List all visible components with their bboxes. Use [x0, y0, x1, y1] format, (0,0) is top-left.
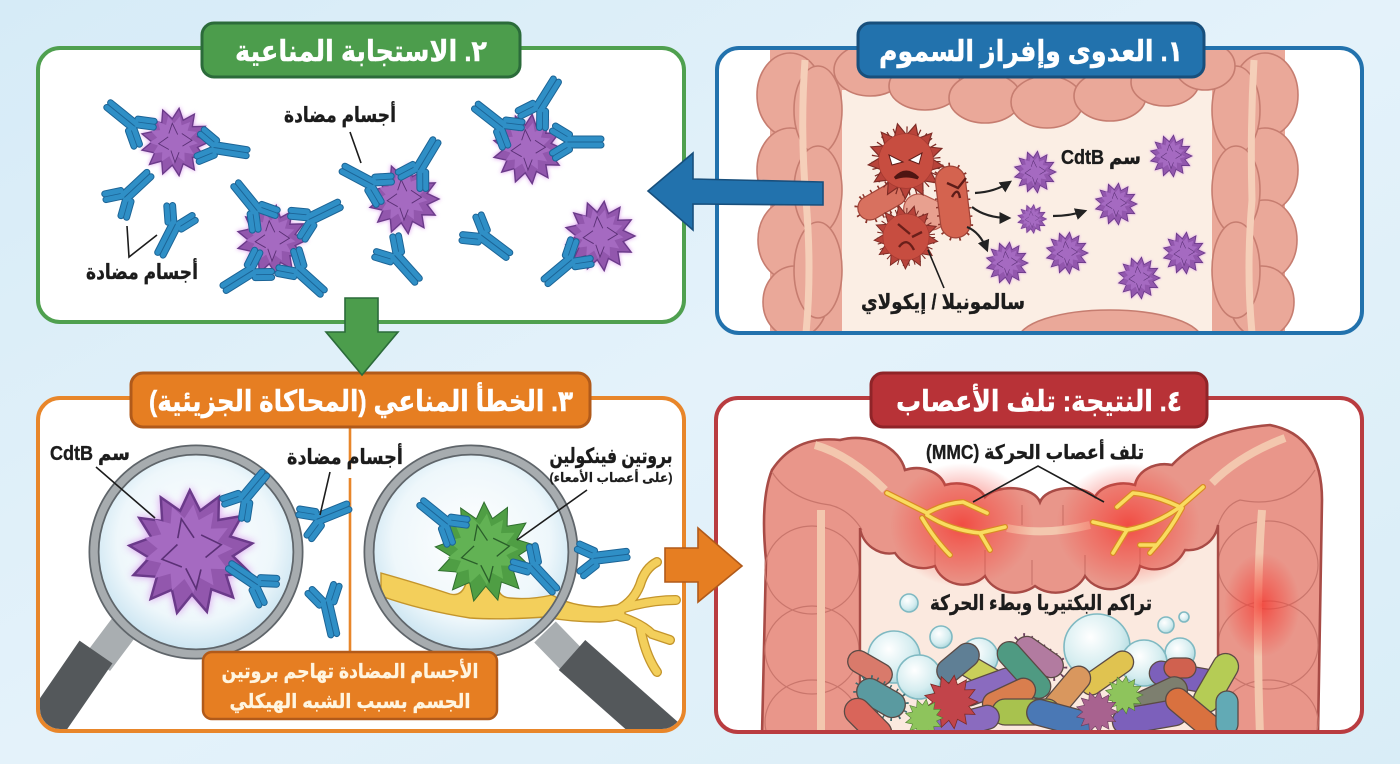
heading 4: ٤. النتيجة: تلف الأعصاب: [896, 383, 1182, 418]
arrow: panel 3 to panel 4: [665, 528, 742, 602]
vinculin protein magnified: [430, 496, 541, 608]
label: vinculin: (على أعصاب الأمعاء): [550, 469, 672, 485]
panel 3 frame: [38, 398, 684, 731]
toxin particles: [985, 134, 1206, 300]
bubbles: [868, 594, 1195, 699]
caption box: الجسم بسبب الشبه الهيكلي: [230, 691, 470, 714]
panel: 1 infection and toxin release: [717, 23, 1362, 370]
heading 4: [871, 373, 1207, 427]
label: salmonella / e. coli: [861, 250, 1025, 315]
viruses with antibodies: [99, 72, 637, 304]
label: CdtB toxin: [50, 443, 155, 518]
label: bacterial buildup: تراكم البكتيريا وبطء الحركة: [930, 592, 1152, 615]
label: CdtB toxin: سم CdtB: [50, 443, 130, 465]
label: motility nerve damage: [926, 438, 1144, 502]
red bacteria cluster: [853, 119, 972, 273]
arrow: panel 2 to panel 3: [326, 298, 398, 375]
label: antibodies top: أجسام مضادة: [284, 100, 396, 127]
magnifier left: [32, 450, 298, 745]
heading 3: ٣. الخطأ المناعي (المحاكاة الجزيئية): [149, 382, 573, 418]
panel: 2 immune response: [38, 23, 684, 322]
bacteria pile: [844, 633, 1240, 730]
release arrows: [967, 182, 1085, 250]
antibodies in panel 3: [221, 464, 629, 638]
panel: 4 result nerve damage: [716, 373, 1362, 764]
heading 3: [131, 373, 590, 427]
label: antibodies bottom-left: أجسام مضادة: [86, 257, 198, 284]
caption box: الأجسام المضادة تهاجم بروتين: [222, 658, 478, 683]
label: salmonella / e. coli: سالمونيلا / إيكولاي: [861, 291, 1025, 315]
damaged colon: [762, 425, 1322, 764]
damaged nerves: [887, 487, 1203, 555]
label: motility nerve damage: تلف أعصاب الحركة (MMC): [926, 438, 1144, 464]
arrow: panel 1 to panel 2: [648, 153, 823, 230]
panel 4 frame: [716, 398, 1362, 732]
caption box: [203, 652, 497, 719]
panel 2 frame: [38, 48, 684, 322]
label: antibodies: أجسام مضادة: [287, 442, 403, 469]
label: vinculin: بروتين فينكولين: [550, 445, 672, 468]
heading 2: [202, 23, 520, 77]
label: antibodies: [287, 442, 403, 515]
label: antibodies top: [284, 100, 396, 163]
magnifier right with nerve fibre: [369, 450, 676, 740]
label: vinculin: [517, 445, 672, 540]
colon illustration: [756, 50, 1299, 331]
heading 1: [858, 23, 1204, 77]
panel 1 frame: [717, 48, 1362, 333]
panel: 3 molecular mimicry: [32, 373, 684, 745]
label: antibodies bottom-left: [86, 226, 198, 284]
CdtB toxin magnified: [119, 478, 265, 625]
heading 1: ١. العدوى وإفراز السموم: [879, 36, 1183, 69]
label: CdtB toxin: سم CdtB: [1061, 147, 1141, 169]
heading 2: ٢. الاستجابة المناعية: [235, 36, 487, 68]
divider: [349, 428, 351, 652]
